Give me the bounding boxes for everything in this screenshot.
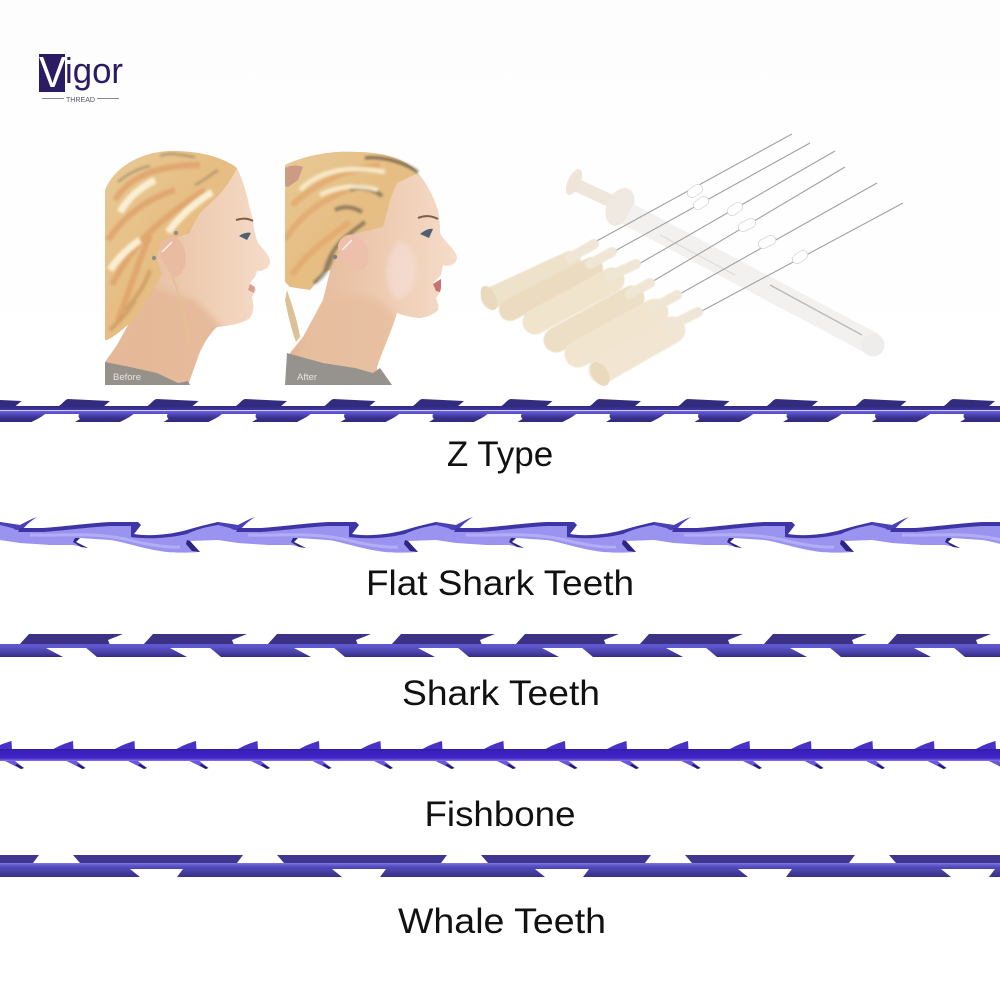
cream hubs	[492, 244, 698, 370]
logo: Vigor Thread: THREAD	[66, 97, 95, 104]
ear	[338, 234, 354, 252]
lips	[248, 284, 255, 293]
photo: before profile	[105, 151, 270, 385]
logo: Vigor Thread: igor	[65, 50, 123, 91]
hair	[285, 152, 418, 290]
ear	[160, 237, 186, 277]
label: Z Type: Z Type	[447, 435, 553, 474]
label: Flat Shark Teeth: Flat Shark Teeth	[366, 564, 634, 603]
thread: Fishbone	[0, 735, 1000, 775]
hub flanges	[477, 283, 613, 389]
white beads	[692, 189, 803, 259]
label: Before: Before	[113, 372, 141, 383]
thread: Z Type	[0, 390, 1000, 426]
hair	[105, 151, 237, 340]
neck and face	[290, 170, 457, 385]
bead outlines	[692, 189, 803, 259]
thread: Flat Shark Teeth	[0, 510, 1000, 560]
logo: Vigor Thread	[39, 48, 123, 104]
label: After: After	[297, 372, 317, 383]
lips	[433, 279, 441, 292]
logo: Vigor Thread: V	[39, 48, 67, 97]
shirt	[285, 353, 392, 385]
eye and brow	[236, 219, 253, 221]
tube	[563, 167, 884, 356]
shirt	[105, 362, 190, 385]
needle wires	[593, 134, 903, 312]
eye and brow	[418, 216, 438, 219]
thread: Shark Teeth	[0, 625, 1000, 665]
thread: Whale Teeth	[0, 853, 1000, 878]
label: Whale Teeth: Whale Teeth	[398, 902, 606, 941]
label: Fishbone: Fishbone	[424, 795, 576, 834]
label: Shark Teeth: Shark Teeth	[402, 674, 600, 713]
neck and face	[105, 168, 270, 385]
product: needles and cannula tube	[477, 134, 903, 389]
hair tie	[285, 166, 303, 187]
photo: after profile	[285, 152, 457, 385]
